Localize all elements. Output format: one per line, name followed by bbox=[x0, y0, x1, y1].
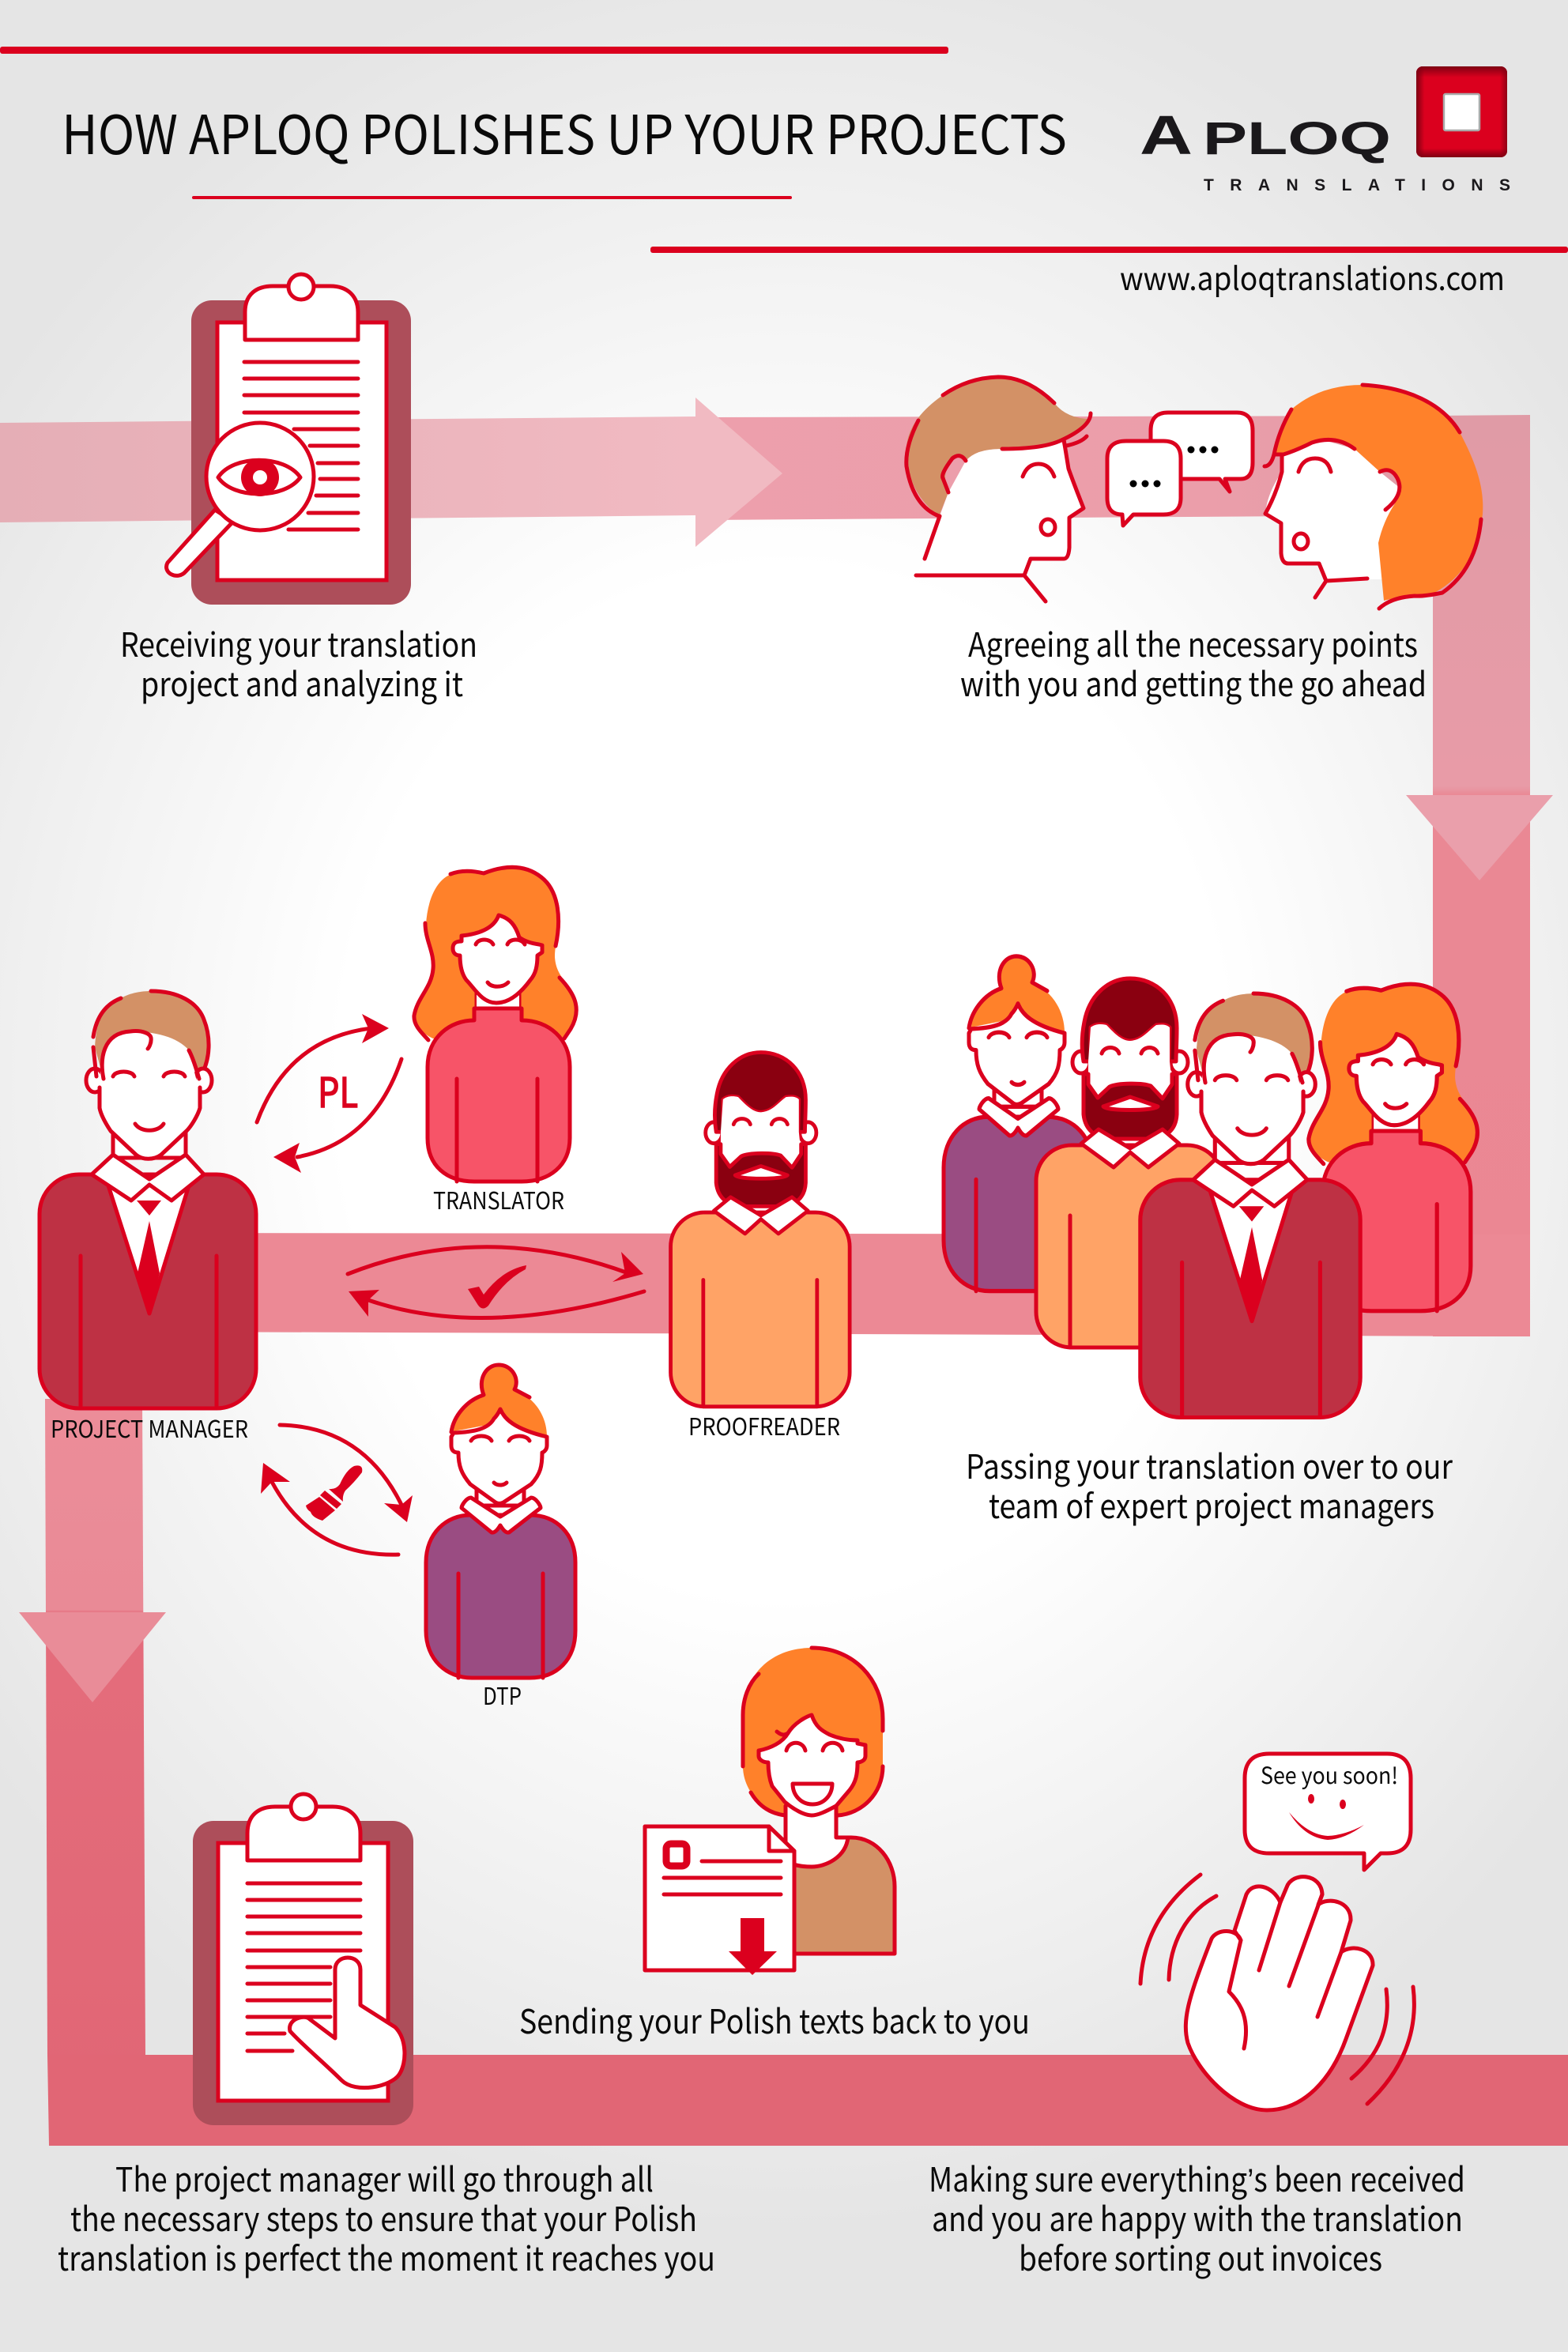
caption: step 6: before sorting out invoices bbox=[1019, 2233, 1382, 2281]
person: project manager bbox=[40, 991, 256, 1408]
neck and neckline bbox=[786, 1806, 848, 1867]
caption: step 4 bbox=[58, 2154, 715, 2281]
title: HOW APLOQ POLISHES UP YOUR PROJECTS bbox=[62, 92, 1067, 170]
arrow: right side down arrow bbox=[1406, 795, 1553, 880]
caption: step 1: project and analyzing it bbox=[141, 658, 463, 707]
caption: step 2: Agreeing all the necessary points bbox=[968, 619, 1418, 667]
caption: step 6: Making sure everything’s been received bbox=[929, 2154, 1465, 2202]
ribbon: right vertical band bbox=[1433, 415, 1530, 1336]
logo bbox=[1140, 66, 1510, 194]
logo wordmark bbox=[1140, 104, 1391, 166]
icon: clipboard with magnifier bbox=[167, 274, 411, 605]
caption: step 1 bbox=[120, 619, 477, 707]
caption: step 3 bbox=[966, 1441, 1453, 1528]
team member: bearded man bbox=[1036, 978, 1223, 1348]
label: translator: TRANSLATOR bbox=[433, 1182, 564, 1216]
label: project manager: PROJECT MANAGER bbox=[51, 1410, 248, 1445]
icon: paint brush bbox=[306, 1465, 362, 1521]
team member: dtp bbox=[944, 956, 1093, 1291]
logo subtitle: TRANSLATIONS bbox=[1204, 176, 1510, 194]
ribbon: middle band bbox=[142, 1233, 1530, 1336]
label: PL: PL bbox=[318, 1060, 358, 1119]
icon: waving hand bbox=[1140, 1875, 1414, 2110]
man head bbox=[906, 377, 1091, 601]
speech bubble: see you soon bbox=[1245, 1754, 1411, 1870]
person: translator bbox=[414, 866, 577, 1182]
second red rule bbox=[650, 247, 1568, 253]
top red rule bbox=[0, 47, 948, 54]
document bbox=[645, 1826, 794, 1970]
speech bubble right bbox=[1151, 413, 1253, 492]
ribbon: bottom band bbox=[47, 2055, 1568, 2146]
outlines bbox=[743, 1648, 883, 1867]
woman body bbox=[790, 1838, 895, 1954]
arrow: first right arrow bbox=[695, 398, 782, 547]
arrows: proofreading exchange bbox=[348, 1247, 644, 1318]
icon: woman sending document bbox=[645, 1648, 895, 1975]
person: dtp bbox=[426, 1365, 575, 1678]
logo wordmark: A bbox=[1140, 104, 1193, 166]
icon: clipboard with pointing hand bbox=[193, 1794, 413, 2125]
team member: manager bbox=[1140, 993, 1360, 1418]
team member: translator bbox=[1309, 983, 1478, 1311]
team group bbox=[944, 956, 1478, 1418]
motion lines bbox=[1140, 1875, 1414, 2104]
logo mark bbox=[1416, 66, 1507, 157]
caption: step 4: The project manager will go through all bbox=[115, 2154, 654, 2202]
ribbon: top band bbox=[0, 416, 1433, 522]
arrows: translation exchange bbox=[257, 1014, 401, 1173]
woman head bbox=[1265, 385, 1483, 609]
arrows: dtp exchange bbox=[261, 1425, 413, 1555]
website url: www.aploqtranslations.com bbox=[1120, 254, 1505, 300]
caption: step 3: team of expert project managers bbox=[989, 1480, 1434, 1528]
ribbon: left vertical band bbox=[45, 1399, 145, 2056]
speech bubble left bbox=[1107, 441, 1181, 526]
caption: step 2 bbox=[960, 619, 1427, 707]
speech bubble: see you soon: See you soon! bbox=[1261, 1758, 1398, 1791]
caption: step 5: Sending your Polish texts back to you bbox=[519, 1996, 1030, 2044]
caption: step 6: and you are happy with the translation bbox=[932, 2193, 1463, 2241]
woman face bbox=[759, 1715, 865, 1815]
title underline bbox=[192, 196, 792, 199]
caption: step 3: Passing your translation over to our bbox=[966, 1441, 1453, 1489]
caption: step 1: Receiving your translation bbox=[120, 619, 477, 667]
label: dtp: DTP bbox=[483, 1677, 522, 1712]
label: proofreader: PROOFREADER bbox=[688, 1408, 840, 1442]
woman hair bbox=[743, 1648, 883, 1815]
caption: step 2: with you and getting the go ahead bbox=[960, 658, 1427, 707]
speech bubble dots bbox=[1187, 446, 1219, 454]
speech bubble dots bbox=[1130, 481, 1160, 487]
icon: two people talking bbox=[906, 377, 1483, 609]
caption: step 4: translation is perfect the moment it reaches you bbox=[58, 2233, 715, 2281]
caption: step 6 bbox=[929, 2154, 1465, 2281]
arrow: left side down arrow bbox=[19, 1612, 166, 1702]
logo wordmark: PLOQ bbox=[1203, 113, 1391, 164]
person: proofreader bbox=[671, 1052, 850, 1407]
caption: step 4: the necessary steps to ensure that your Polish bbox=[70, 2193, 697, 2241]
icon: check mark bbox=[468, 1265, 526, 1309]
